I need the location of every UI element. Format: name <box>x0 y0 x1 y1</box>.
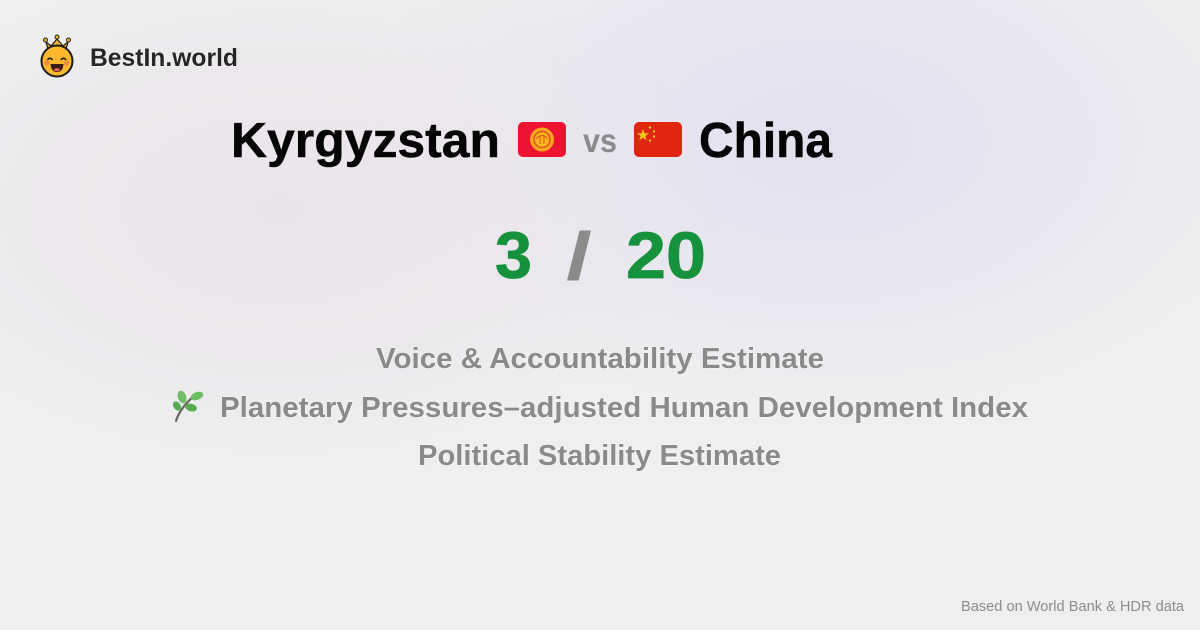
score: China rank: 20 <box>626 218 706 292</box>
source note: Based on World Bank & HDR data <box>961 599 1185 615</box>
score separator: / <box>567 219 591 293</box>
metric label: voice and accountability: Voice & Accountability Estimate <box>376 343 824 375</box>
vs label: vs <box>583 122 617 159</box>
metric label: political stability: Political Stability Estimate <box>418 440 781 472</box>
brand name: BestIn.world <box>90 44 238 72</box>
icon: Kyrgyzstan flag <box>518 122 566 157</box>
title: China: China <box>699 114 833 168</box>
logo: crown smiley <box>42 35 72 76</box>
score: Kyrgyzstan rank: 3 <box>495 218 532 292</box>
metric label: planetary pressures: Planetary Pressures–adjusted Human Development Index <box>220 392 1028 424</box>
icon: China flag <box>634 122 682 157</box>
title: Kyrgyzstan: Kyrgyzstan <box>231 114 500 168</box>
icon: herb sprig <box>171 389 204 421</box>
